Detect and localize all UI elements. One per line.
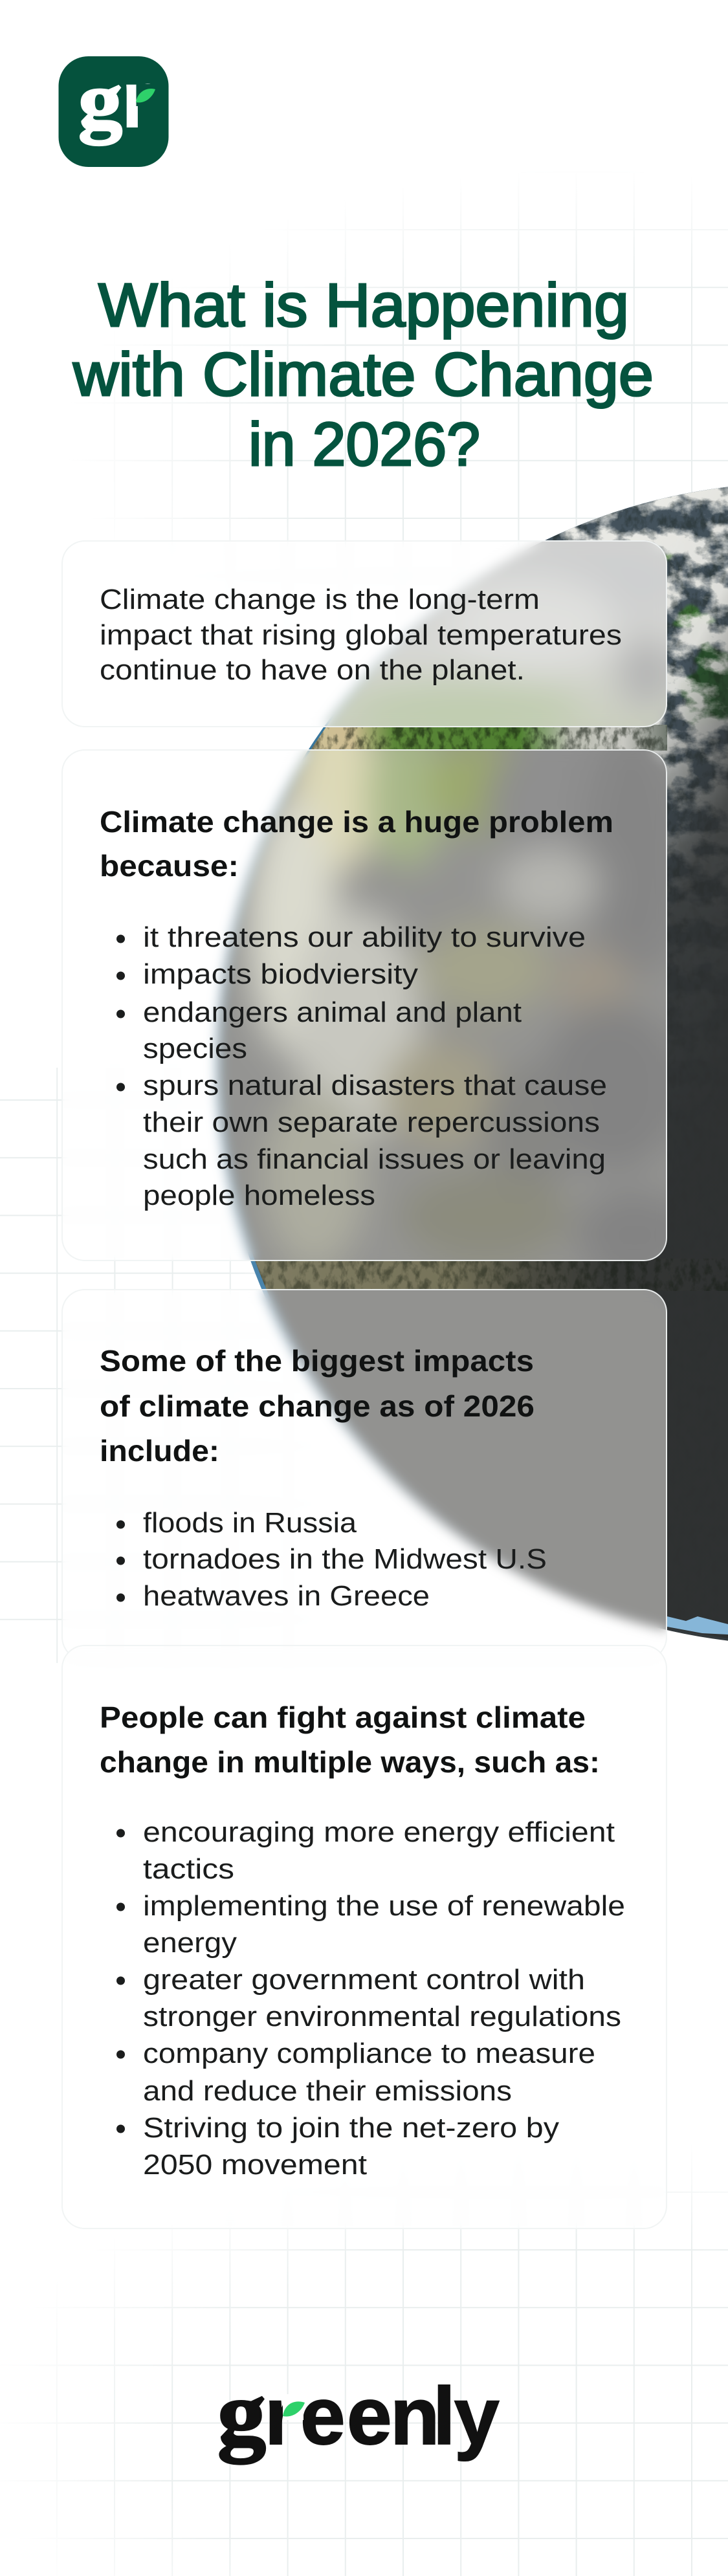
list: reasons: impacts biodviersity (142, 958, 418, 990)
list: actions: implementing the use of renewable (142, 1889, 625, 1922)
background grid: lower (56, 2185, 728, 2576)
heading: biggest impacts (100, 1343, 535, 1468)
title: in 2026? (248, 410, 480, 479)
list: reasons: species (142, 1033, 247, 1064)
list: reasons: such as financial issues or leaving (142, 1143, 606, 1175)
list: impacts: heatwaves in Greece (142, 1580, 430, 1611)
panel: why climate change is a problem (61, 749, 667, 1261)
list: actions: 2050 movement (142, 2148, 366, 2181)
panel: definition of climate change (61, 540, 667, 727)
heading: ways to fight: change in multiple ways, such as: (100, 1745, 599, 1778)
logo: greenly wordmark: e (347, 2372, 392, 2461)
logo: greenly wordmark: y (454, 2372, 500, 2461)
icon: greenly app logo (58, 55, 168, 167)
background grid: left middle (0, 1068, 255, 1663)
panel: ways to fight climate change (61, 1645, 667, 2229)
list: actions: tactics (142, 1853, 234, 1884)
list: actions: energy (142, 1927, 237, 1958)
heading: huge problem (100, 805, 613, 883)
list: reasons: endangers animal and plant (142, 996, 522, 1028)
logo: greenly wordmark: r (265, 2372, 296, 2461)
logo: greenly wordmark: l (433, 2372, 456, 2461)
background grid: upper (146, 210, 728, 540)
title: What is Happening (98, 271, 629, 340)
heading: huge problem: Climate change is a huge problem (100, 805, 613, 839)
heading: ways to fight: People can fight against climate (100, 1701, 585, 1734)
list: actions: company compliance to measure (142, 2037, 595, 2069)
logo: greenly wordmark: e (300, 2372, 346, 2461)
text block: definition (100, 584, 621, 686)
list: impacts: tornadoes in the Midwest U.S (142, 1543, 546, 1575)
text block: definition: Climate change is the long-term (100, 584, 540, 615)
heading: biggest impacts: Some of the biggest impacts (100, 1343, 533, 1377)
heading: biggest impacts: include: (100, 1434, 219, 1468)
list: reasons: people homeless (142, 1179, 375, 1211)
title: with Climate Change (72, 340, 654, 409)
icon: greenly app logo: g (78, 56, 122, 146)
logo: greenly wordmark: n (390, 2372, 439, 2461)
list: reasons: their own separate repercussions (142, 1106, 600, 1138)
logo: greenly wordmark (217, 2363, 500, 2464)
list: reasons: it threatens our ability to survive (142, 921, 585, 952)
icon: greenly app logo: r (121, 55, 153, 145)
list: actions: and reduce their emissions (142, 2075, 511, 2107)
list: reasons: spurs natural disasters that cause (142, 1069, 607, 1101)
image: planet earth (214, 479, 728, 1662)
text block: definition: continue to have on the planet. (100, 654, 524, 686)
list: reasons (116, 921, 607, 1211)
heading: huge problem: because: (100, 849, 238, 883)
list: actions: stronger environmental regulations (142, 2001, 621, 2032)
title (72, 271, 654, 479)
heading: ways to fight (100, 1701, 599, 1778)
heading: biggest impacts: of climate change as of 2026 (100, 1389, 535, 1422)
logo: greenly wordmark: g (217, 2363, 266, 2464)
list: actions (116, 1816, 625, 2181)
panel: biggest impacts (61, 1289, 667, 1660)
list: actions: greater government control with (142, 1963, 584, 1996)
list: impacts: floods in Russia (142, 1506, 357, 1539)
list: actions: encouraging more energy efficient (142, 1816, 615, 1848)
list: actions: Striving to join the net-zero by (142, 2112, 558, 2143)
list: impacts (116, 1506, 546, 1611)
text block: definition: impact that rising global temperatures (100, 619, 621, 651)
